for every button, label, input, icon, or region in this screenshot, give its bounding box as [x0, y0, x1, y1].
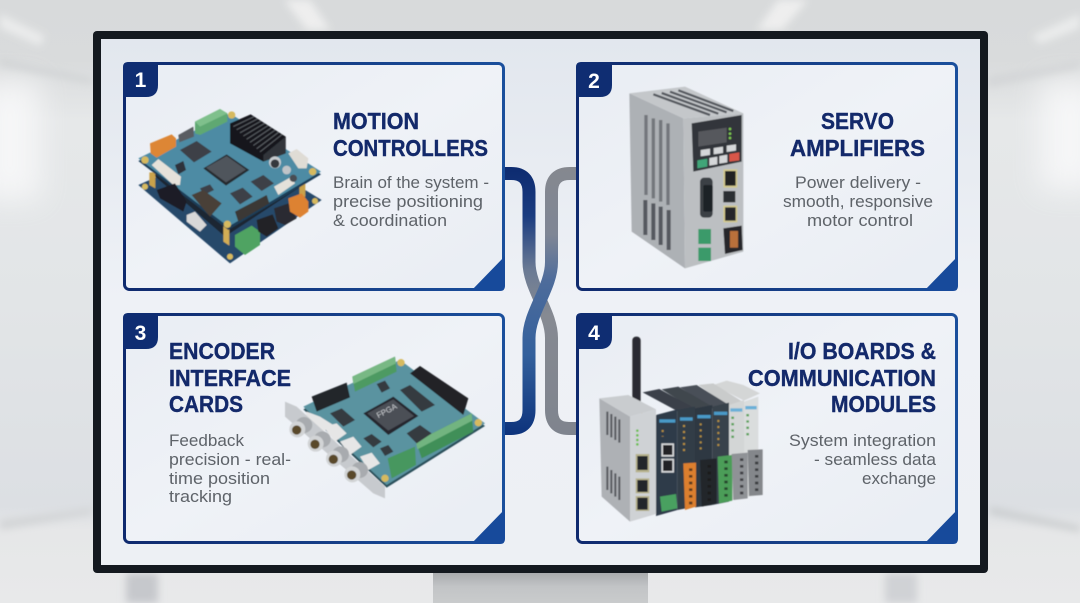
description: precise positioning [333, 192, 483, 211]
corner accent [924, 509, 958, 544]
connector ribbons [505, 174, 577, 428]
panel 2: servo amplifiers [576, 62, 958, 291]
icon: stacked controller board [138, 109, 322, 263]
heading: COMMUNICATION [748, 365, 936, 391]
description: exchange [862, 469, 936, 488]
number badge 1 [123, 62, 158, 97]
heading: SERVO [821, 108, 894, 134]
heading [790, 108, 925, 161]
heading [748, 338, 936, 417]
description: Brain of the system - [333, 173, 489, 192]
description: Power delivery - [795, 173, 921, 192]
description [783, 173, 933, 230]
corner accent [471, 256, 505, 291]
number badge 4: 4 [588, 322, 600, 345]
monitor frame [93, 31, 988, 573]
number badge 3: 3 [135, 322, 146, 345]
heading: MOTION [333, 108, 419, 134]
number badge 2 [576, 62, 612, 97]
description: - seamless data [814, 450, 937, 469]
monitor stand [433, 573, 648, 603]
icon: FPGA encoder card [285, 357, 485, 498]
icon: I/O module rack with antenna [599, 337, 763, 522]
heading [333, 108, 488, 161]
description [333, 173, 489, 230]
description: motor control [807, 211, 913, 230]
heading: INTERFACE [169, 365, 291, 391]
description [789, 431, 937, 488]
corner accent [924, 256, 958, 291]
heading: AMPLIFIERS [790, 135, 925, 161]
panel 1: motion controllers [123, 62, 505, 291]
description [169, 431, 291, 506]
icon: FPGA encoder card: FPGA [375, 402, 399, 420]
description: System integration [789, 431, 936, 450]
number badge 2: 2 [588, 70, 600, 93]
heading [169, 338, 291, 417]
description: Feedback [169, 431, 244, 450]
description: smooth, responsive [783, 192, 933, 211]
heading: I/O BOARDS & [788, 338, 936, 364]
heading: MODULES [831, 391, 936, 417]
number badge 1: 1 [135, 69, 147, 92]
corner accent [471, 509, 505, 544]
panel 4: I/O boards and communication modules [576, 313, 958, 544]
heading: CONTROLLERS [333, 135, 488, 161]
heading: CARDS [169, 391, 243, 417]
number badge 3 [123, 313, 158, 349]
panel 3: encoder interface cards [123, 313, 505, 544]
icon: servo drive [629, 87, 743, 268]
heading: ENCODER [169, 338, 275, 364]
description: time position [169, 469, 270, 488]
number badge 4 [576, 313, 612, 349]
description: precision - real- [169, 450, 291, 469]
description: tracking [169, 487, 232, 506]
description: & coordination [333, 211, 447, 230]
